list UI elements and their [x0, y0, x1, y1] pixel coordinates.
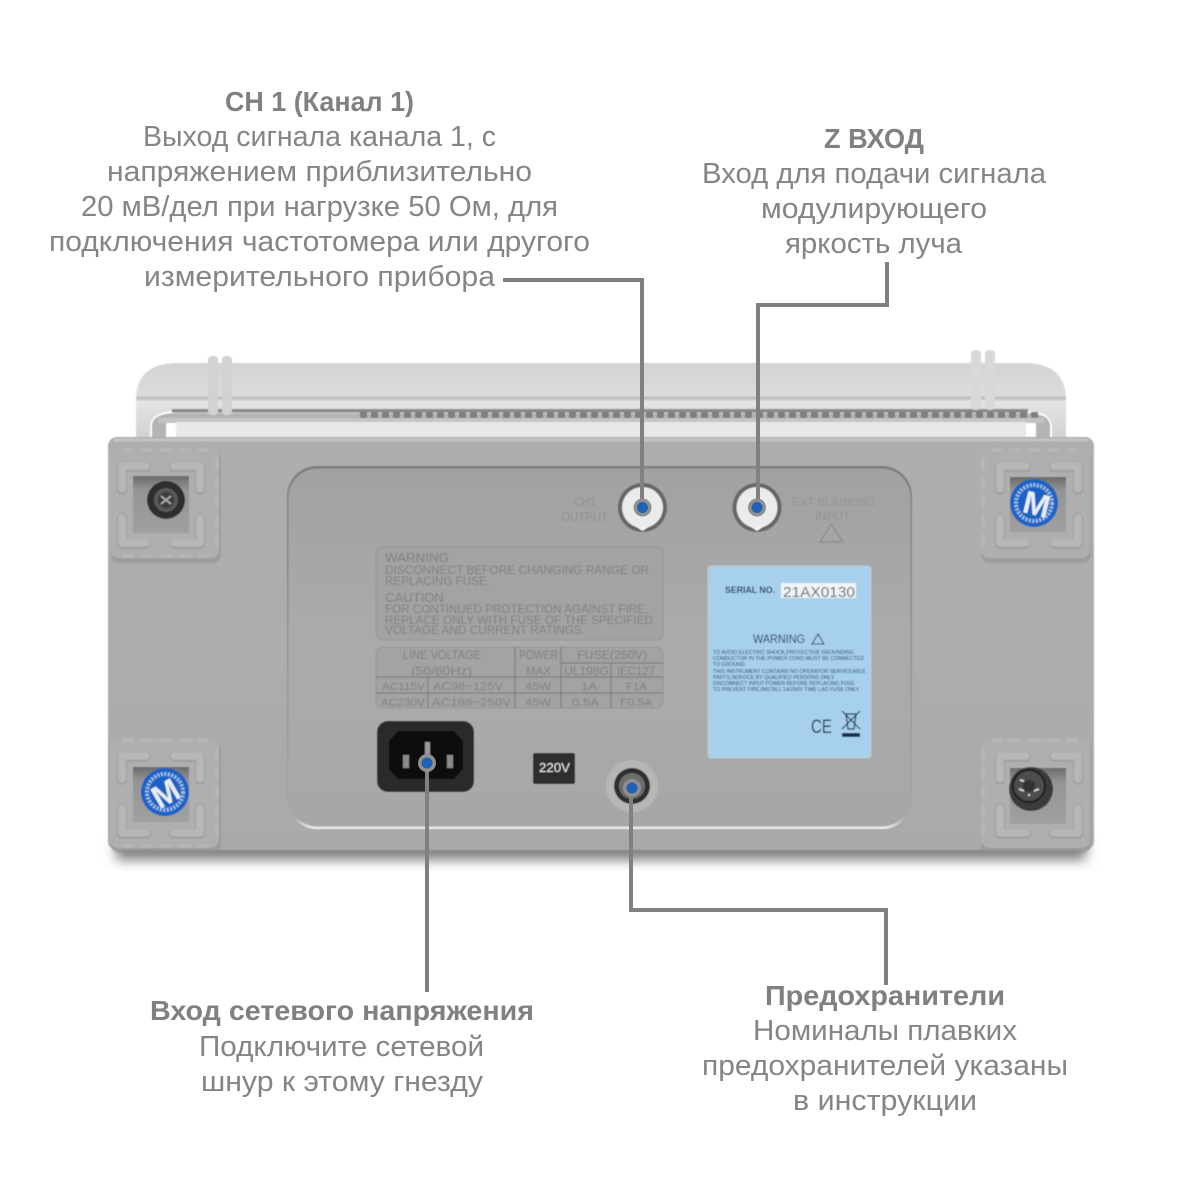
marker: mains input: [418, 754, 436, 772]
warning plate: REPLACING FUSE.: [385, 574, 490, 588]
ratings table: LINE VOLTAGE: [403, 648, 481, 662]
label: CH1 output: OUTPUT: [561, 510, 609, 524]
BNC connector: CH1: [618, 483, 667, 532]
recessed panel: [287, 466, 912, 829]
text block: mains input: шнур к этому гнезду: [201, 1066, 484, 1098]
ratings table: 0.5A: [572, 697, 600, 709]
service label: TO PREVENT FIRE,INSTALL 1A/250V TIME LAG FUSE ONLY.: [713, 687, 860, 693]
warning plate: WARNING: [385, 550, 449, 565]
text block: Z input: [702, 123, 1046, 260]
text block: Z input: Вход для подачи сигнала: [702, 158, 1046, 190]
voltage indicator 220V: [533, 753, 575, 784]
text block: CH 1: напряжением приблизительно: [107, 156, 532, 188]
service label: WARNING: [753, 632, 805, 646]
text block: Z input: яркость луча: [785, 228, 962, 260]
ratings table: AC230V: [381, 697, 426, 709]
marker: Z input: [748, 498, 766, 516]
label: EXT blanking input: EXT BLANKING: [792, 495, 875, 509]
text block: fuses: Номиналы плавких: [753, 1015, 1017, 1047]
text block: fuses: в инструкции: [793, 1085, 977, 1117]
ratings table: F0.5A: [620, 697, 653, 709]
ratings table: AC115V: [382, 681, 426, 693]
text block: Z input: модулирующего: [761, 193, 987, 225]
service label: THIS INSTRUMENT CONTAINS NO OPERATOR SERVICEABLE: [713, 669, 866, 675]
foot: bottom right: [981, 738, 1091, 853]
ratings table: MAX: [526, 664, 551, 678]
foot: bottom left: [110, 738, 221, 853]
text block: mains input: [150, 995, 534, 1098]
ratings table: [376, 647, 663, 709]
foot: top left: [110, 448, 221, 563]
warning plate: FOR CONTINUED PROTECTION AGAINST FIRE,: [385, 602, 648, 616]
text block: CH 1: измерительного прибора: [144, 261, 495, 293]
leader: mains input: [425, 763, 429, 992]
power inlet: [377, 721, 474, 792]
marker: fuses: [623, 779, 641, 797]
text block: CH 1: [49, 86, 590, 293]
text block: CH 1: 20 мВ/дел при нагрузке 50 Ом, для: [81, 191, 558, 223]
ratings table: 1A: [581, 681, 598, 693]
sticker: bottom left: M: [145, 771, 186, 816]
leader: Z input: [758, 262, 887, 505]
service label: SERIAL NO.: [725, 585, 775, 595]
warning plate: DISCONNECT BEFORE CHANGING RANGE OR: [385, 563, 649, 577]
sticker: top right: M: [1019, 484, 1054, 525]
text block: fuses: предохранителей указаны: [702, 1050, 1068, 1082]
text block: CH 1: Выход сигнала канала 1, с: [143, 121, 496, 153]
service label: CE: [811, 717, 832, 738]
label: CH1 output: [561, 495, 609, 524]
warning plate: CAUTION: [385, 590, 444, 605]
warning plate: VOLTAGE AND CURRENT RATINGS.: [385, 623, 585, 637]
service label: DISCONNECT INPUT POWER BEFORE REPLACING FUSE.: [713, 681, 856, 687]
text block: fuses: [702, 980, 1068, 1117]
service label: CONDUCTOR IN THE POWER CORD MUST BE CONNECTED: [713, 656, 864, 662]
text block: CH 1: подключения частотомера или другого: [49, 226, 590, 258]
foot: top right: [981, 448, 1091, 563]
label: EXT blanking input: [792, 495, 875, 542]
fuse holder: [606, 760, 658, 812]
voltage indicator 220V: 220V: [539, 760, 570, 775]
ratings table: FUSE(250V): [577, 648, 647, 662]
service label: [708, 566, 871, 758]
label: CH1 output: CH1: [574, 495, 596, 509]
housing: [108, 437, 1094, 850]
service label: 21AX0130: [783, 584, 855, 601]
text block: mains input: Подключите сетевой: [199, 1031, 484, 1063]
BNC connector: Z input: [732, 483, 782, 532]
ratings table: AC198~250V: [432, 697, 512, 709]
ratings table: (50/60Hz): [411, 664, 472, 678]
ratings table: F1A: [626, 681, 648, 693]
ratings table: AC98~125V: [433, 681, 504, 693]
leader: CH1: [503, 280, 642, 505]
carrying handle: [136, 350, 1066, 438]
ratings table: 45W: [525, 681, 552, 693]
text block: mains input: Вход сетевого напряжения: [150, 995, 534, 1026]
cast shadow: [116, 838, 1086, 860]
ratings table: UL198G: [564, 664, 609, 678]
device: rear panel photo: [108, 350, 1094, 860]
text block: fuses: Предохранители: [765, 980, 1005, 1011]
text block: Z input: Z ВХОД: [824, 123, 924, 154]
ratings table: 45W: [525, 697, 552, 709]
service label: TO AVOID ELECTRIC SHOCK,PROTECTIVE GROUNDING: [713, 650, 854, 656]
marker: CH1: [634, 498, 652, 516]
warning plate: REPLACE ONLY WITH FUSE OF THE SPECIFIED: [385, 613, 653, 627]
ratings table: IEC127: [617, 664, 655, 678]
label: EXT blanking input: INPUT: [815, 509, 851, 523]
warning plate: [376, 547, 663, 640]
sticker: top right: [1010, 479, 1058, 527]
screw: top left: [147, 481, 185, 519]
screw: bottom right: [1009, 767, 1053, 811]
ratings table: POWER: [519, 648, 558, 662]
service label: PARTS,SERVICE BY QUALIFIED PERSONS ONLY.: [713, 675, 835, 681]
text block: CH 1: CH 1 (Канал 1): [225, 86, 414, 117]
service label: TO GROUND.: [713, 662, 746, 668]
leader: fuses: [631, 788, 886, 985]
